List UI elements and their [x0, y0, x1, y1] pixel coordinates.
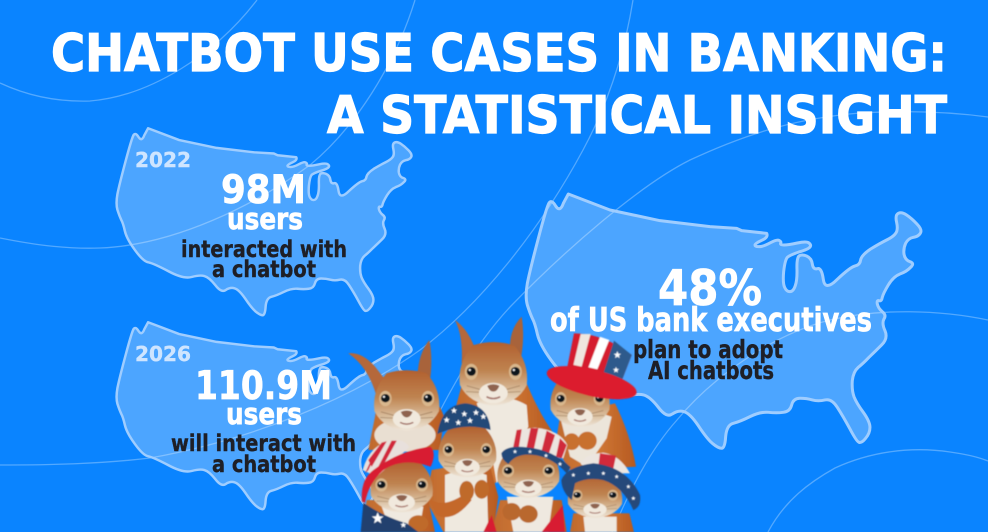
top hat	[544, 333, 639, 406]
map shape large	[526, 194, 921, 448]
striped red cap	[362, 440, 434, 503]
caption 2022: interacted with	[181, 237, 347, 263]
subject label: of US bank executives	[550, 300, 872, 339]
caption 2022: a chatbot	[212, 257, 316, 283]
caption 2022	[181, 237, 347, 283]
squirrel right with top hat	[544, 333, 639, 470]
caption: plan to adopt	[633, 335, 783, 364]
red scarf	[483, 505, 565, 532]
caption 2026	[171, 431, 356, 478]
map shape 2022	[117, 128, 412, 315]
caption 2026: a chatbot	[212, 452, 316, 478]
squirrel back left	[348, 340, 444, 452]
panel: executives map	[526, 194, 921, 448]
striped hat	[501, 428, 571, 473]
panel: 2022 map	[117, 128, 412, 315]
caption: AI chatbots	[648, 356, 774, 385]
caption	[633, 335, 783, 385]
squirrel front with striped hat	[483, 428, 571, 532]
squirrel back center	[455, 317, 554, 490]
stat 98M: 98M	[221, 168, 306, 213]
users label: users	[227, 202, 303, 236]
flag scarf	[361, 503, 418, 532]
map shape 2026	[117, 322, 412, 509]
bucket hat	[561, 453, 640, 510]
squirrel front right with bucket hat	[561, 453, 640, 532]
stat 48%: 48%	[658, 260, 762, 317]
stat 110.9M: 110.9M	[195, 364, 332, 409]
panel: 2026 map	[117, 322, 412, 509]
users label: users	[226, 397, 302, 431]
squirrel front left with red cap	[361, 440, 435, 532]
squirrel front center with star cap	[426, 403, 498, 532]
squirrels illustration	[348, 317, 640, 532]
title	[51, 24, 947, 146]
year 2022: 2022	[135, 148, 191, 172]
star cap	[437, 403, 491, 434]
caption 2026: will interact with	[171, 431, 356, 457]
year 2026: 2026	[135, 342, 191, 366]
